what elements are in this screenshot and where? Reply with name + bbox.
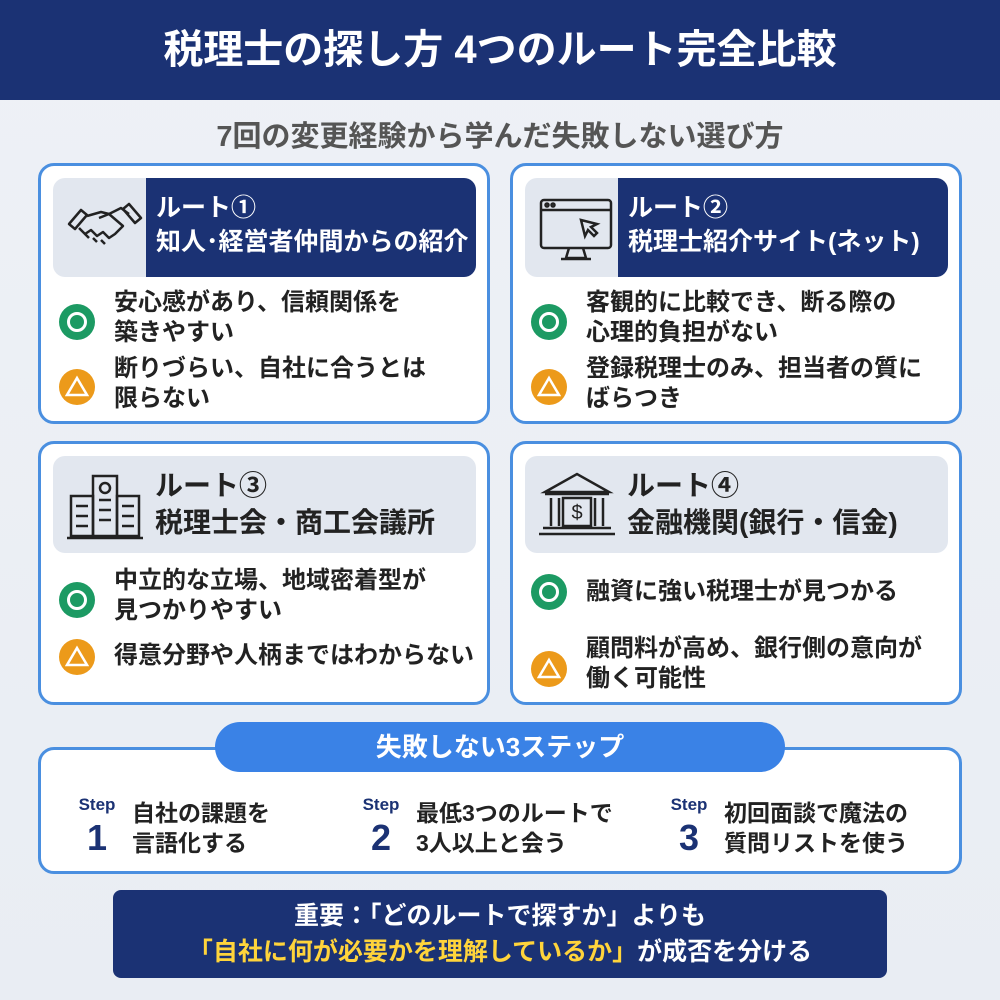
- step 2: 3人以上と会う: [416, 830, 567, 856]
- panel: route 1: [38, 163, 490, 424]
- step 1: [79, 795, 270, 858]
- step 2: Step: [363, 795, 399, 814]
- callout: key message: 重要：「どのルートで探すか」よりも: [294, 902, 706, 930]
- label route 1: [146, 178, 476, 277]
- con: 働く可能性: [586, 665, 706, 692]
- panel: route 4: [510, 441, 962, 705]
- pro: [531, 574, 898, 610]
- icon: monitor: [540, 198, 612, 260]
- step 2: 2: [371, 817, 391, 858]
- step 1: 自社の課題を: [132, 800, 270, 826]
- label route 4: 金融機関(銀行・信金): [627, 507, 898, 538]
- icon: handshake: [68, 202, 142, 245]
- con: [531, 635, 922, 692]
- subtitle: 7回の変更経験から学んだ失敗しない選び方: [216, 121, 784, 153]
- label route 2: [618, 178, 948, 277]
- con: 顧問料が高め、銀行側の意向が: [586, 635, 922, 662]
- pro: 築きやすい: [114, 319, 234, 346]
- con: 限らない: [114, 385, 210, 412]
- pro: 融資に強い税理士が見つかる: [586, 578, 898, 605]
- header route 2: [525, 178, 948, 277]
- label route 3: [155, 470, 435, 538]
- panel: route 3: [38, 441, 490, 705]
- label route 4: ルート④: [627, 470, 739, 501]
- step 3: 質問リストを使う: [724, 830, 908, 856]
- pro: [531, 289, 896, 346]
- con: ばらつき: [586, 385, 682, 412]
- steps heading pill: 失敗しない3ステップ: [376, 732, 624, 762]
- panel: steps: [38, 747, 962, 874]
- pro: 心理的負担がない: [586, 319, 778, 346]
- icon: building: [67, 474, 143, 540]
- con: 得意分野や人柄まではわからない: [114, 642, 474, 669]
- icon: bank: [539, 472, 615, 536]
- callout: key message: [113, 890, 887, 978]
- step 1: 1: [87, 817, 107, 858]
- step 2: 最低3つのルートで: [416, 800, 613, 826]
- con: [59, 639, 474, 675]
- label route 3: 税理士会・商工会議所: [155, 507, 435, 538]
- pro: 見つかりやすい: [114, 597, 282, 624]
- step 3: Step: [671, 795, 707, 814]
- pro: 客観的に比較でき、断る際の: [586, 289, 896, 316]
- step 3: 3: [679, 817, 699, 858]
- header route 1: [53, 178, 476, 277]
- pro: 安心感があり、信頼関係を: [114, 289, 401, 316]
- step 1: Step: [79, 795, 115, 814]
- label route 1: ルート①: [156, 194, 256, 222]
- icon: bank: $: [571, 502, 583, 524]
- header route 4: [525, 456, 948, 553]
- step 3: 初回面談で魔法の: [724, 800, 908, 826]
- header route 3: [53, 456, 476, 553]
- pro: [59, 289, 401, 346]
- steps heading pill: [215, 722, 785, 772]
- con: [531, 355, 922, 412]
- con: [59, 355, 426, 412]
- step 1: 言語化する: [132, 830, 247, 856]
- label route 2: ルート②: [628, 194, 728, 222]
- step 2: [363, 795, 613, 858]
- title bar: 税理士の探し方 4つのルート完全比較: [163, 28, 837, 72]
- callout: key message: 「自社に何が必要かを理解しているか」が成否を分ける: [188, 938, 812, 966]
- panel: route 2: [510, 163, 962, 424]
- title bar: [0, 0, 1000, 100]
- label route 3: ルート③: [155, 470, 267, 501]
- con: 断りづらい、自社に合うとは: [114, 355, 426, 382]
- pro: 中立的な立場、地域密着型が: [114, 567, 426, 594]
- con: 登録税理士のみ、担当者の質に: [586, 355, 922, 382]
- step 3: [671, 795, 908, 858]
- label route 1: 知人･経営者仲間からの紹介: [156, 228, 469, 256]
- label route 4: [627, 470, 898, 538]
- pro: [59, 567, 426, 624]
- label route 2: 税理士紹介サイト(ネット): [628, 228, 920, 256]
